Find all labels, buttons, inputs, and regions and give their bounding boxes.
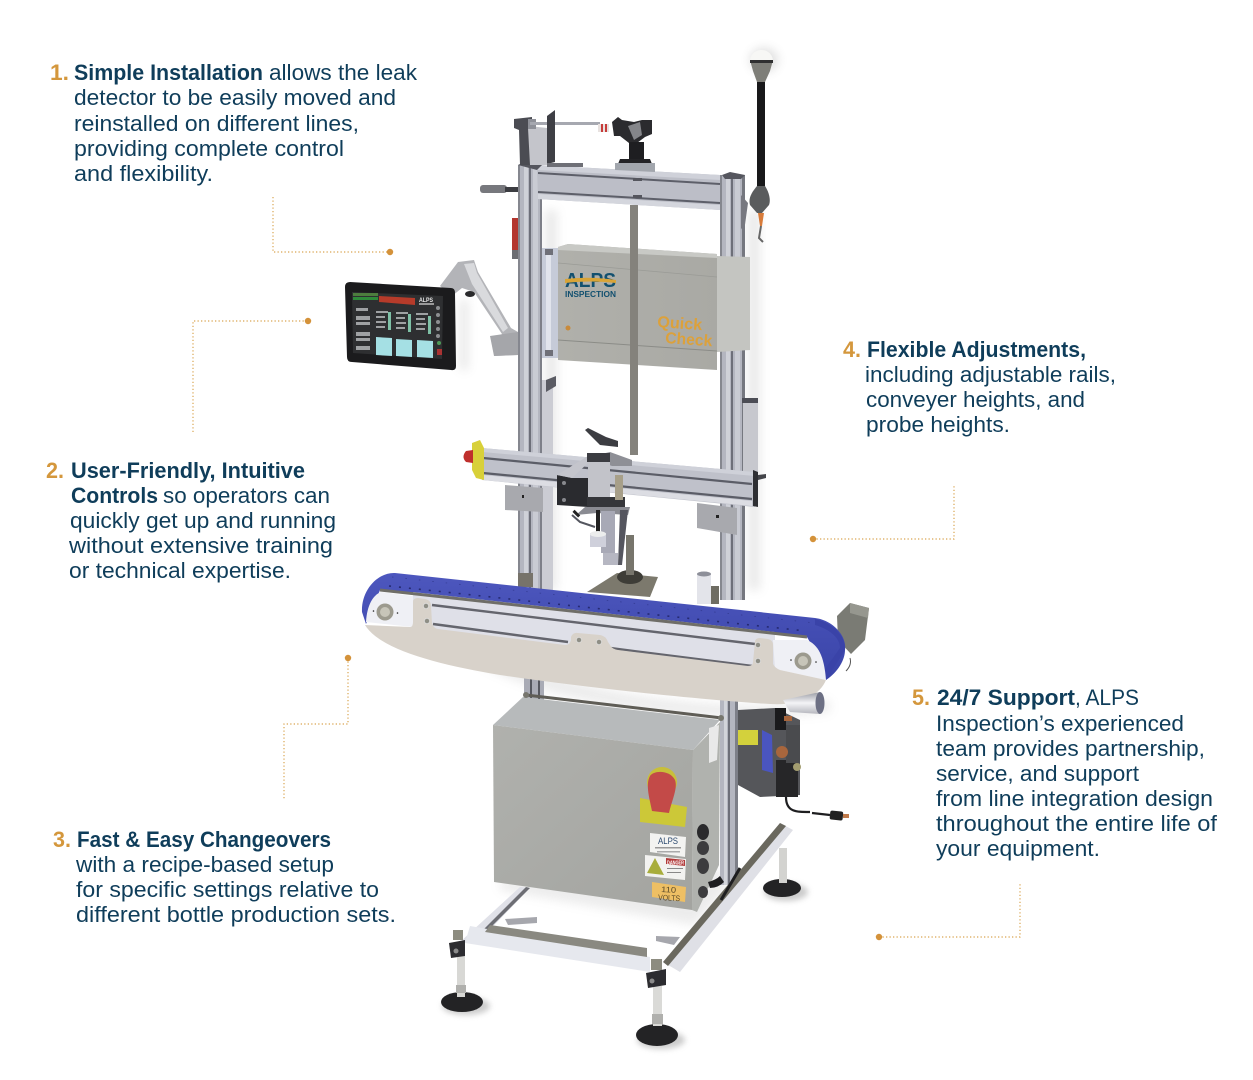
valve assembly <box>738 708 801 797</box>
callout 1: simple installation: reinstalled on different lines, <box>74 111 359 136</box>
red side switch <box>512 218 518 259</box>
voltage label: VOLTS <box>658 893 680 903</box>
callout 5: 24/7 support: throughout the entire life of <box>936 811 1218 836</box>
callout 3: fast and easy changeovers: Fast & Easy Changeovers <box>77 827 331 852</box>
cable glands <box>697 824 740 900</box>
callout 3: fast and easy changeovers <box>53 827 396 927</box>
callout 4: flexible adjustments: including adjustable rails, <box>865 362 1116 387</box>
top crossbar <box>518 161 745 210</box>
leader line 1 <box>273 197 393 255</box>
left rail <box>460 887 530 943</box>
right rail <box>663 823 793 972</box>
callout 5: 24/7 support: 5. <box>912 685 930 710</box>
Quick Check mark: Check <box>665 330 713 350</box>
callout 4: flexible adjustments: Flexible Adjustments, <box>867 337 1086 362</box>
base frame rear <box>460 823 808 972</box>
cross tabs <box>505 917 537 925</box>
callout 2: user-friendly controls: User-Friendly, Intuitive <box>71 458 305 483</box>
danger label <box>645 855 686 880</box>
callout 1: simple installation: 1. <box>50 60 69 85</box>
adjustment crossbar <box>464 440 766 507</box>
left upright <box>518 165 556 590</box>
callout 4: flexible adjustments: 4. <box>843 337 861 362</box>
mounting plates <box>505 485 737 535</box>
callout 5: 24/7 support: Inspection’s experienced <box>936 711 1184 736</box>
callout 3: fast and easy changeovers: with a recipe-based setup <box>75 852 334 877</box>
monitor arm <box>440 260 518 356</box>
callout 2: user-friendly controls: Controls <box>71 483 158 508</box>
callout 4: flexible adjustments <box>843 337 1116 437</box>
centre rod <box>630 205 638 455</box>
callout 5: 24/7 support: from line integration design <box>936 786 1213 811</box>
callout 1: simple installation: providing complete control <box>74 136 344 161</box>
discharge tube <box>783 692 824 714</box>
top clamp assembly <box>514 110 655 172</box>
callout 2: user-friendly controls: or technical expertise. <box>69 558 291 583</box>
rear cup <box>697 572 719 604</box>
right foot <box>763 848 808 901</box>
callout 1: simple installation: allows the leak <box>269 60 418 85</box>
danger label: DANGER <box>667 860 684 866</box>
soft shadows <box>450 48 830 925</box>
ALPS logo: INSPECTION <box>565 289 616 299</box>
Quick Check mark <box>657 314 713 350</box>
probe platform <box>587 535 658 597</box>
control enclosure <box>493 692 740 912</box>
beige guard panel <box>365 598 826 704</box>
callout 5: 24/7 support <box>912 685 1218 861</box>
callout 3: fast and easy changeovers: different bottle production sets. <box>76 902 396 927</box>
motor <box>837 603 869 671</box>
ALPS logo: ALPS <box>565 270 616 292</box>
disconnect switch <box>640 767 687 827</box>
callout 1: simple installation: and flexibility. <box>74 161 213 186</box>
power cord <box>786 797 849 821</box>
leader line 3 <box>284 655 351 800</box>
callout 2: user-friendly controls: 2. <box>46 458 64 483</box>
screen settings columns <box>356 308 428 350</box>
callout 2: user-friendly controls: so operators can <box>163 483 330 508</box>
touchscreen monitor <box>345 282 456 370</box>
front left foot and corner <box>441 930 490 1015</box>
guard screws <box>423 603 761 664</box>
probe carriage <box>557 428 632 565</box>
callout 5: 24/7 support: , ALPS <box>1075 685 1139 710</box>
Quick Check mark: Quick <box>657 314 703 334</box>
front rail <box>465 926 650 972</box>
silver side rail <box>413 592 775 670</box>
callout 5: 24/7 support: team provides partnership, <box>936 736 1205 761</box>
callout 1: simple installation: Simple Installation <box>74 60 263 85</box>
stack light <box>741 50 773 242</box>
ALPS nameplate <box>650 833 686 857</box>
screen side icons <box>436 306 442 355</box>
right upright <box>720 175 758 600</box>
conveyor <box>362 573 869 704</box>
left pulley plate <box>366 592 413 627</box>
callout 1: simple installation: detector to be easily moved and <box>74 85 396 110</box>
machine illustration <box>345 48 869 1049</box>
callout 3: fast and easy changeovers: 3. <box>53 827 71 852</box>
callout 2: user-friendly controls <box>46 458 336 583</box>
callout 5: 24/7 support: your equipment. <box>936 836 1100 861</box>
screen header: ALPS <box>419 298 433 304</box>
front right foot and corner <box>636 959 685 1049</box>
callout 4: flexible adjustments: probe heights. <box>866 412 1010 437</box>
leader line 5 <box>876 882 1020 940</box>
crank handle <box>480 185 518 193</box>
ALPS nameplate: ALPS <box>658 836 678 846</box>
belt lip <box>380 590 807 637</box>
callout 4: flexible adjustments: conveyer heights, and <box>866 387 1085 412</box>
callout 5: 24/7 support: 24/7 Support <box>937 685 1076 710</box>
belt <box>362 573 845 680</box>
leader line 4 <box>810 484 954 542</box>
callout 1: simple installation <box>50 60 418 186</box>
leader line 2 <box>193 318 311 432</box>
voltage label <box>652 882 686 903</box>
callout 3: fast and easy changeovers: for specific settings relative to <box>76 877 379 902</box>
right pulley plate <box>773 640 826 680</box>
screen status ticks <box>388 312 431 334</box>
callout 5: 24/7 support: service, and support <box>936 761 1139 786</box>
rail slots <box>432 605 755 666</box>
callout 2: user-friendly controls: without extensive training <box>68 533 333 558</box>
screen cyan buttons <box>376 337 433 358</box>
callout 2: user-friendly controls: quickly get up and running <box>70 508 336 533</box>
voltage label: 110 <box>661 885 677 895</box>
back panel with branding <box>542 244 750 370</box>
lower upright sections behind conveyor <box>524 675 738 885</box>
